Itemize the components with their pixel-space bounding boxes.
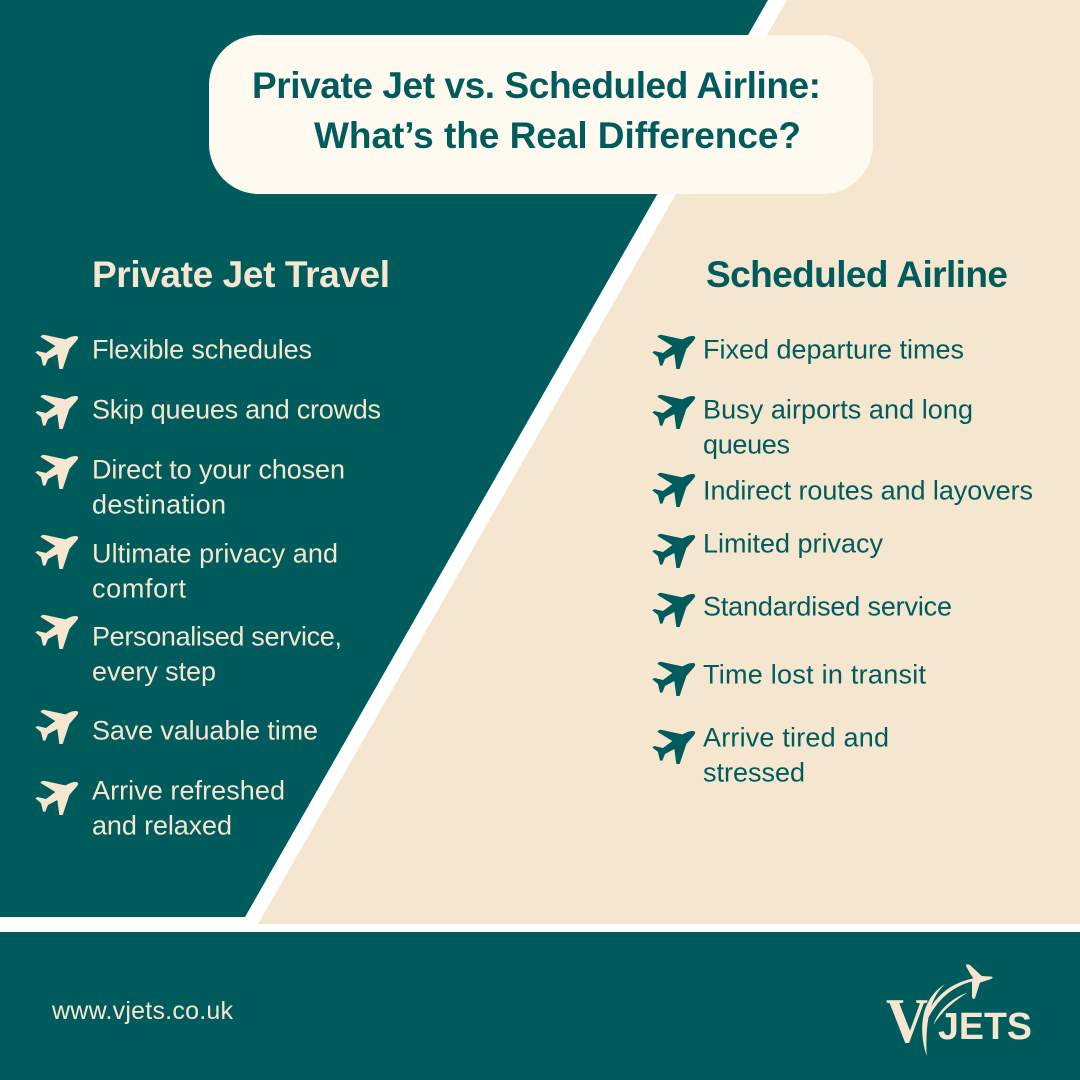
item: personalised: every step bbox=[92, 656, 216, 686]
item: time lost: Time lost in transit bbox=[703, 660, 926, 690]
item: personalised: Personalised service, bbox=[92, 622, 342, 652]
logo: vjets: V bbox=[886, 985, 928, 1056]
title card: What’s the Real Difference? bbox=[314, 115, 801, 156]
item: skip queues: Skip queues and crowds bbox=[92, 394, 381, 424]
logo: vjets: JETS bbox=[938, 1006, 1032, 1048]
logo: vjets bbox=[886, 964, 1032, 1056]
item: busy airports bbox=[652, 394, 973, 460]
title card: Private Jet vs. Scheduled Airline: bbox=[252, 65, 821, 106]
item: privacy: Ultimate privacy and bbox=[92, 538, 338, 568]
item: save time bbox=[35, 710, 318, 746]
item: arrive refreshed bbox=[35, 776, 285, 840]
item: time lost bbox=[652, 660, 926, 696]
item: personalised bbox=[35, 615, 342, 686]
item: indirect routes: Indirect routes and layovers bbox=[703, 476, 1033, 506]
item: direct: Direct to your chosen bbox=[92, 454, 345, 484]
website url: www.vjets.co.uk bbox=[51, 997, 234, 1025]
item: busy airports: Busy airports and long bbox=[703, 394, 973, 424]
item: standardised service: Standardised service bbox=[703, 592, 952, 622]
panel: scheduled airline list bbox=[652, 334, 1033, 788]
item: fixed departure: Fixed departure times bbox=[703, 334, 964, 364]
item: direct: destination bbox=[92, 490, 226, 520]
heading: scheduled airline: Scheduled Airline bbox=[706, 254, 1008, 295]
item: arrive tired: Arrive tired and bbox=[703, 722, 889, 752]
heading: private jet travel: Private Jet Travel bbox=[92, 254, 390, 295]
item: arrive tired bbox=[652, 722, 889, 788]
footer band bbox=[0, 932, 1080, 1080]
title card bbox=[209, 35, 873, 194]
item: arrive refreshed: Arrive refreshed bbox=[92, 776, 285, 806]
item: busy airports: queues bbox=[703, 430, 790, 460]
item: privacy bbox=[35, 535, 338, 604]
item: flexible schedules bbox=[35, 334, 312, 369]
panel: private jet dark left bbox=[0, 0, 768, 917]
item: limited privacy bbox=[652, 528, 884, 568]
item: arrive tired: stressed bbox=[703, 758, 805, 788]
item: privacy: comfort bbox=[92, 574, 186, 604]
item: save time: Save valuable time bbox=[92, 716, 318, 746]
item: direct bbox=[35, 454, 345, 520]
item: limited privacy: Limited privacy bbox=[703, 528, 884, 558]
item: arrive refreshed: and relaxed bbox=[92, 810, 232, 840]
item: flexible schedules: Flexible schedules bbox=[92, 334, 312, 364]
panel: private jet list bbox=[35, 334, 381, 840]
